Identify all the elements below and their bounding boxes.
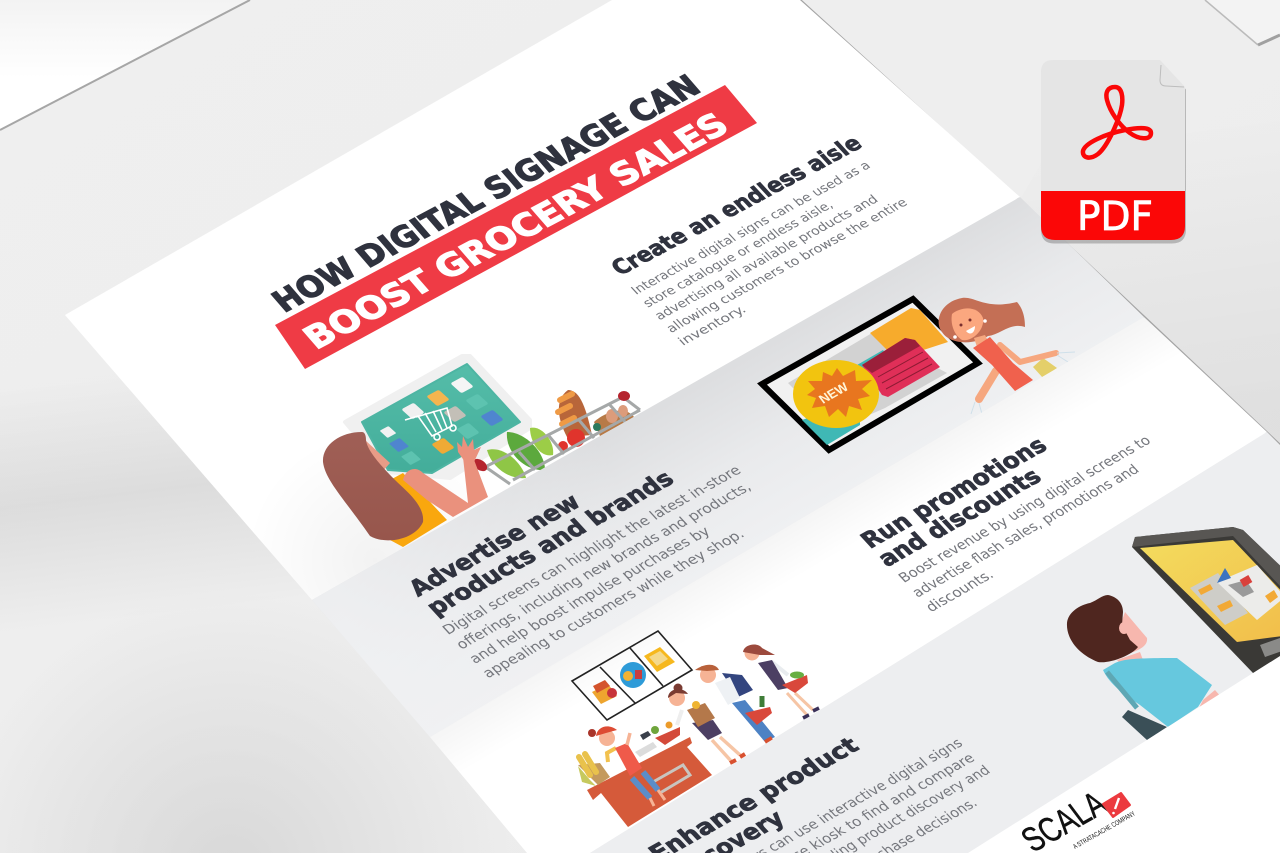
text block: enhance product discovery	[643, 732, 994, 853]
Adobe symbol	[1083, 87, 1151, 158]
bag	[1033, 358, 1057, 378]
tablet app tiles	[380, 377, 504, 465]
body copy: allowing customers to browse the entire	[664, 196, 911, 336]
cart icon on screen	[405, 408, 456, 440]
white page top panel	[65, 0, 1020, 600]
counter rail	[653, 765, 690, 793]
face	[952, 308, 983, 340]
person bag strap	[1107, 672, 1137, 708]
counter basket	[651, 722, 680, 745]
tablet screen	[362, 364, 520, 473]
person bag	[1122, 710, 1167, 740]
woman face	[365, 440, 390, 478]
tablet frame	[345, 356, 530, 478]
woman torso	[390, 473, 447, 547]
neck	[974, 335, 990, 350]
cashier	[588, 726, 665, 806]
blue circle icon	[620, 662, 646, 688]
new label: NEW	[816, 379, 852, 406]
company strapline: A STRATACACHE COMPANY	[1072, 811, 1137, 851]
heading: Run promotions	[855, 432, 1053, 553]
illustration: promotional screen	[762, 299, 978, 450]
background sheet top left	[0, 0, 250, 130]
body copy: store catalogue or endless aisle,	[640, 198, 837, 311]
kiosk top face	[1132, 527, 1280, 586]
vegetables and groceries	[487, 390, 634, 478]
panel: gray band advertise	[312, 197, 1144, 737]
person ear	[1119, 622, 1126, 634]
yellow new badge	[793, 360, 879, 428]
body copy: discounts.	[923, 568, 997, 615]
starburst	[807, 368, 872, 417]
person arm	[1200, 690, 1219, 707]
teal card	[802, 400, 860, 445]
screen paper background	[788, 333, 947, 430]
file body	[1041, 60, 1185, 191]
dress	[973, 337, 1033, 391]
kiosk card slot	[1260, 638, 1280, 657]
woman arm	[403, 457, 488, 517]
orange card	[870, 308, 948, 356]
body copy: offerings, including new brands and products,	[453, 480, 755, 653]
text block: create an endless aisle	[606, 132, 923, 349]
screen frame	[762, 299, 978, 450]
footer white strip	[968, 656, 1280, 853]
red exclamation badge	[1103, 793, 1130, 817]
bag handles	[971, 352, 1075, 414]
text block: run promotions	[855, 432, 1182, 615]
cart	[471, 391, 640, 484]
body copy: advertise flash sales, promotions and	[909, 462, 1143, 601]
yellow document icon	[644, 647, 675, 672]
heading: and discounts	[872, 463, 1047, 572]
body copy: Digital screens can highlight the latest in-store	[440, 463, 745, 638]
shopper with paper bag	[668, 684, 745, 763]
file fold	[1160, 65, 1184, 87]
body copy: advertising all available products and	[652, 193, 882, 323]
body copy	[629, 158, 923, 349]
body copy: and help boost impulse purchases by	[467, 524, 714, 667]
person neck	[1117, 652, 1142, 662]
smile	[966, 326, 975, 333]
text block: advertise new products	[403, 446, 785, 681]
page right edge	[800, 0, 1280, 445]
woman hair	[323, 432, 423, 540]
panel: white band promotions	[430, 317, 1267, 853]
eyes	[960, 324, 962, 326]
body copy: Interactive digital signs can be used as a	[629, 159, 874, 298]
illustration: person at kiosk	[1067, 527, 1280, 740]
counter	[587, 737, 712, 827]
heading: Advertise new	[403, 489, 586, 601]
bread bag	[578, 754, 610, 786]
three digital screens	[572, 631, 692, 720]
gift icon	[592, 680, 617, 704]
body copy: Boost revenue by using digital screens to	[896, 433, 1154, 586]
person shirt	[1103, 658, 1212, 727]
arm left	[979, 371, 996, 399]
earrings	[983, 319, 987, 323]
kiosk yellow screen	[1140, 540, 1280, 642]
person face	[1122, 612, 1148, 653]
arm right	[1000, 345, 1056, 362]
hair back	[939, 298, 1025, 342]
illustration: checkout screens and queue	[572, 631, 819, 827]
woman hand	[457, 436, 481, 462]
body copy: appealing to customers while they shop.	[480, 527, 748, 681]
panel: gray band discovery	[590, 432, 1280, 853]
kiosk screen leaflet	[1190, 565, 1280, 625]
background sheet top right	[1205, 0, 1280, 45]
cash register	[635, 731, 657, 757]
kiosk body	[1132, 527, 1280, 673]
file shadow	[1041, 62, 1186, 244]
red footer	[1041, 191, 1185, 240]
shopper with basket	[743, 645, 819, 718]
person hair	[1067, 595, 1138, 662]
illustration: woman using tablet with shopping cart	[323, 356, 640, 547]
title line two: BOOST GROCERY SALES	[296, 106, 737, 357]
body copy: inventory.	[675, 303, 750, 349]
logo: Scala	[1013, 783, 1137, 853]
icon: PDF file	[1041, 60, 1186, 244]
heading: products and brands	[421, 465, 679, 621]
title line one: HOW DIGITAL SIGNAGE CAN	[264, 68, 708, 319]
title	[264, 68, 757, 369]
illustration: woman with shopping bags	[939, 298, 1075, 414]
title red banner	[275, 85, 757, 369]
PDF label: PDF	[1077, 194, 1153, 240]
pink card	[862, 338, 940, 397]
shopper with backpack	[695, 665, 775, 742]
heading: Create an endless aisle	[606, 132, 868, 280]
